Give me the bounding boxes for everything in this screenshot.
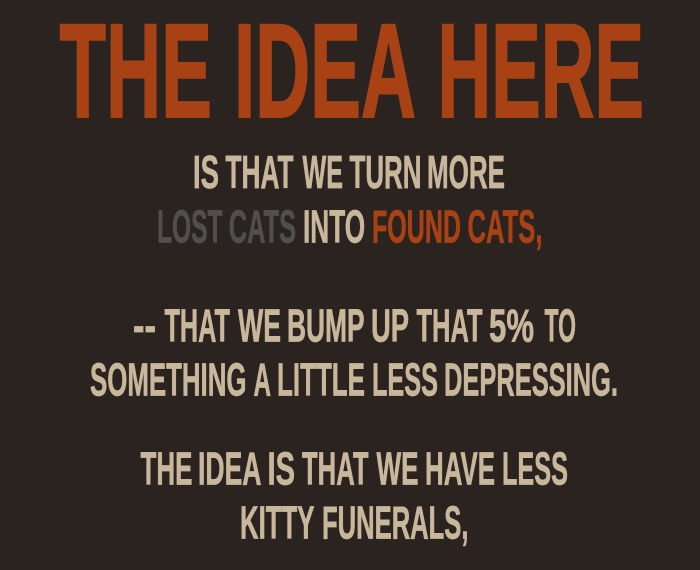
text block: bump up that 5% [90, 300, 618, 406]
text block: turn more lost cats into found cats: INTO [303, 201, 365, 253]
text block: less kitty funerals: HAVE [425, 443, 495, 495]
text block: less kitty funerals: WE [376, 443, 418, 495]
highlighted phrase: found cats: FOUND [372, 201, 461, 253]
text block: bump up that 5%: LITTLE [277, 354, 365, 406]
highlighted phrase: lost cats: CATS [229, 201, 296, 253]
text block: bump up that 5%: THAT [416, 300, 482, 352]
text block: turn more lost cats into found cats: WE [302, 146, 343, 198]
text block: turn more lost cats into found cats: IS [193, 146, 219, 198]
text block: less kitty funerals: KITTY [240, 497, 314, 549]
text block: turn more lost cats into found cats: THAT [226, 146, 294, 198]
text block: less kitty funerals: THAT [302, 443, 368, 495]
text block: less kitty funerals [140, 443, 568, 549]
text block: less kitty funerals: FUNERALS, [322, 497, 468, 549]
text block: bump up that 5%: A [254, 354, 271, 406]
text block: bump up that 5%: SOMETHING [90, 354, 246, 406]
title [60, 0, 644, 146]
text block: turn more lost cats into found cats [157, 146, 542, 253]
text block: less kitty funerals: IS [268, 443, 295, 495]
text block: less kitty funerals: LESS [502, 443, 568, 495]
text block: less kitty funerals: IDEA [198, 443, 262, 495]
title: THE [60, 0, 212, 146]
text block: turn more lost cats into found cats: MORE [427, 146, 505, 198]
text block: bump up that 5%: THAT [164, 300, 230, 352]
text block: less kitty funerals: THE [140, 443, 192, 495]
text block: bump up that 5%: WE [238, 300, 281, 352]
text block: bump up that 5%: BUMP [287, 300, 364, 352]
highlighted phrase: found cats: CATS, [468, 201, 542, 253]
text block: turn more lost cats into found cats: TURN [350, 146, 422, 198]
text block: bump up that 5%: UP [371, 300, 409, 352]
title: IDEA [234, 0, 416, 146]
text block: bump up that 5%: TO [544, 300, 576, 352]
text block: bump up that 5%: LESS [372, 354, 438, 406]
text block: bump up that 5%: -- [133, 300, 156, 352]
highlighted phrase: lost cats: LOST [157, 201, 222, 253]
text block: bump up that 5%: 5% [489, 300, 534, 352]
